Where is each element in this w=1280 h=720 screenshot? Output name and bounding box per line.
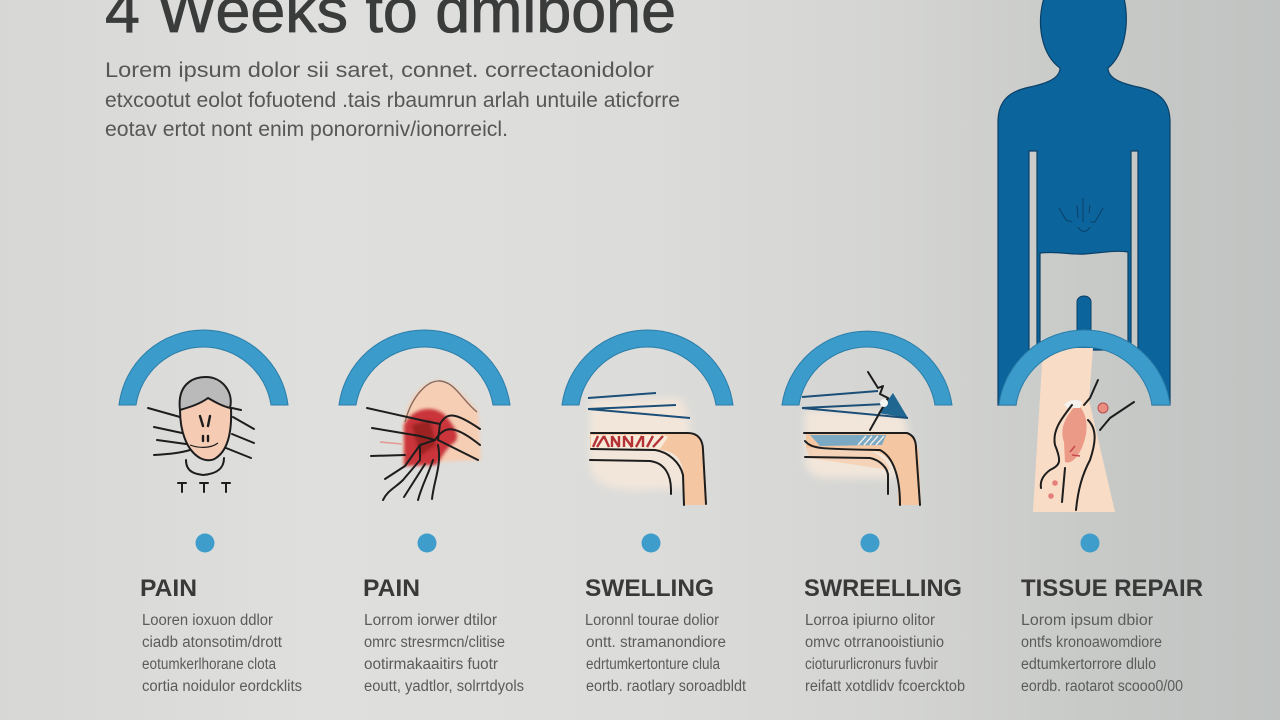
- dot 3: [642, 534, 660, 552]
- text 4: reifatt xotdlidv fcoercktob: [805, 678, 965, 695]
- text 1: cortia noidulor eordcklits: [142, 678, 302, 695]
- human body figure: [998, 0, 1170, 405]
- navel mark: [1059, 198, 1103, 232]
- text 5: ontfs kronoawomdiore: [1021, 634, 1162, 651]
- text 3: ontt. stramanondiore: [586, 634, 726, 651]
- icon: tendon with crack and blue tissue: [802, 372, 921, 505]
- dot 5: [1080, 534, 1100, 552]
- step 5: tissue repair: [999, 330, 1203, 695]
- arc 4: [782, 331, 952, 405]
- text 2: ootirmakaaitirs fuotr: [364, 656, 498, 673]
- text 3: edrtumkertonture clula: [586, 656, 720, 673]
- arc 1: [119, 330, 288, 405]
- icon: tissue repair wedge: [1033, 348, 1134, 512]
- heading 3: SWELLING: [585, 575, 714, 602]
- text 2: [364, 612, 524, 695]
- text 3: eortb. raotlary soroadbldt: [586, 678, 747, 695]
- heading 4: SWREELLING: [804, 575, 962, 602]
- text 1: ciadb atonsotim/drott: [142, 634, 283, 651]
- icon: head with pain lines: [148, 377, 254, 492]
- text 3: [585, 612, 747, 695]
- intro paragraph: [105, 59, 680, 141]
- intro paragraph: etxcootut eolot fofuotend .tais rbaumrun arlah untuile aticforre: [105, 89, 680, 112]
- text 2: omrc stresrmcn/clitise: [364, 634, 505, 651]
- heading 5: TISSUE REPAIR: [1021, 575, 1203, 602]
- centre stub: [1077, 296, 1091, 336]
- text 5: [1021, 612, 1183, 695]
- icon: tendon with red hatching: [588, 393, 706, 505]
- text 2: Lorrom iorwer dtilor: [364, 612, 497, 629]
- text 1: Looren ioxuon ddlor: [142, 612, 273, 629]
- intro paragraph: Lorem ipsum dolor sii saret, connet. correctaonidolor: [105, 59, 654, 82]
- text 4: omvc otrranooistiunio: [805, 634, 944, 651]
- arc 3: [562, 330, 733, 405]
- heading 1: PAIN: [140, 575, 197, 602]
- arc 2: [339, 330, 510, 405]
- step 4: swrelling: [782, 331, 965, 695]
- dot 4: [860, 534, 880, 552]
- intro paragraph: eotav ertot nont enim ponororniv/ionorreicl.: [105, 118, 508, 141]
- dot 1: [196, 534, 214, 552]
- text 4: ciotururlicronurs fuvbir: [805, 656, 938, 673]
- text 4: [805, 612, 965, 695]
- icon: inflamed joint: [367, 381, 481, 500]
- step 2: pain: [339, 330, 524, 695]
- step 3: swelling: [562, 330, 747, 695]
- arc 5: [999, 330, 1170, 405]
- text 5: edtumkertorrore dlulo: [1021, 656, 1156, 673]
- text 1: eotumkerlhorane clota: [142, 656, 276, 673]
- text 3: Loronnl tourae dolior: [585, 612, 719, 629]
- text 4: Lorroa ipiurno olitor: [805, 612, 935, 629]
- text 5: Lorom ipsum dbior: [1021, 612, 1153, 629]
- heading 2: PAIN: [363, 575, 420, 602]
- dot 2: [418, 534, 436, 552]
- step 1: pain: [119, 330, 302, 695]
- text 2: eoutt, yadtlor, solrrtdyols: [364, 678, 524, 695]
- text 5: eordb. raotarot scooo0/00: [1021, 678, 1183, 695]
- text 1: [142, 612, 302, 695]
